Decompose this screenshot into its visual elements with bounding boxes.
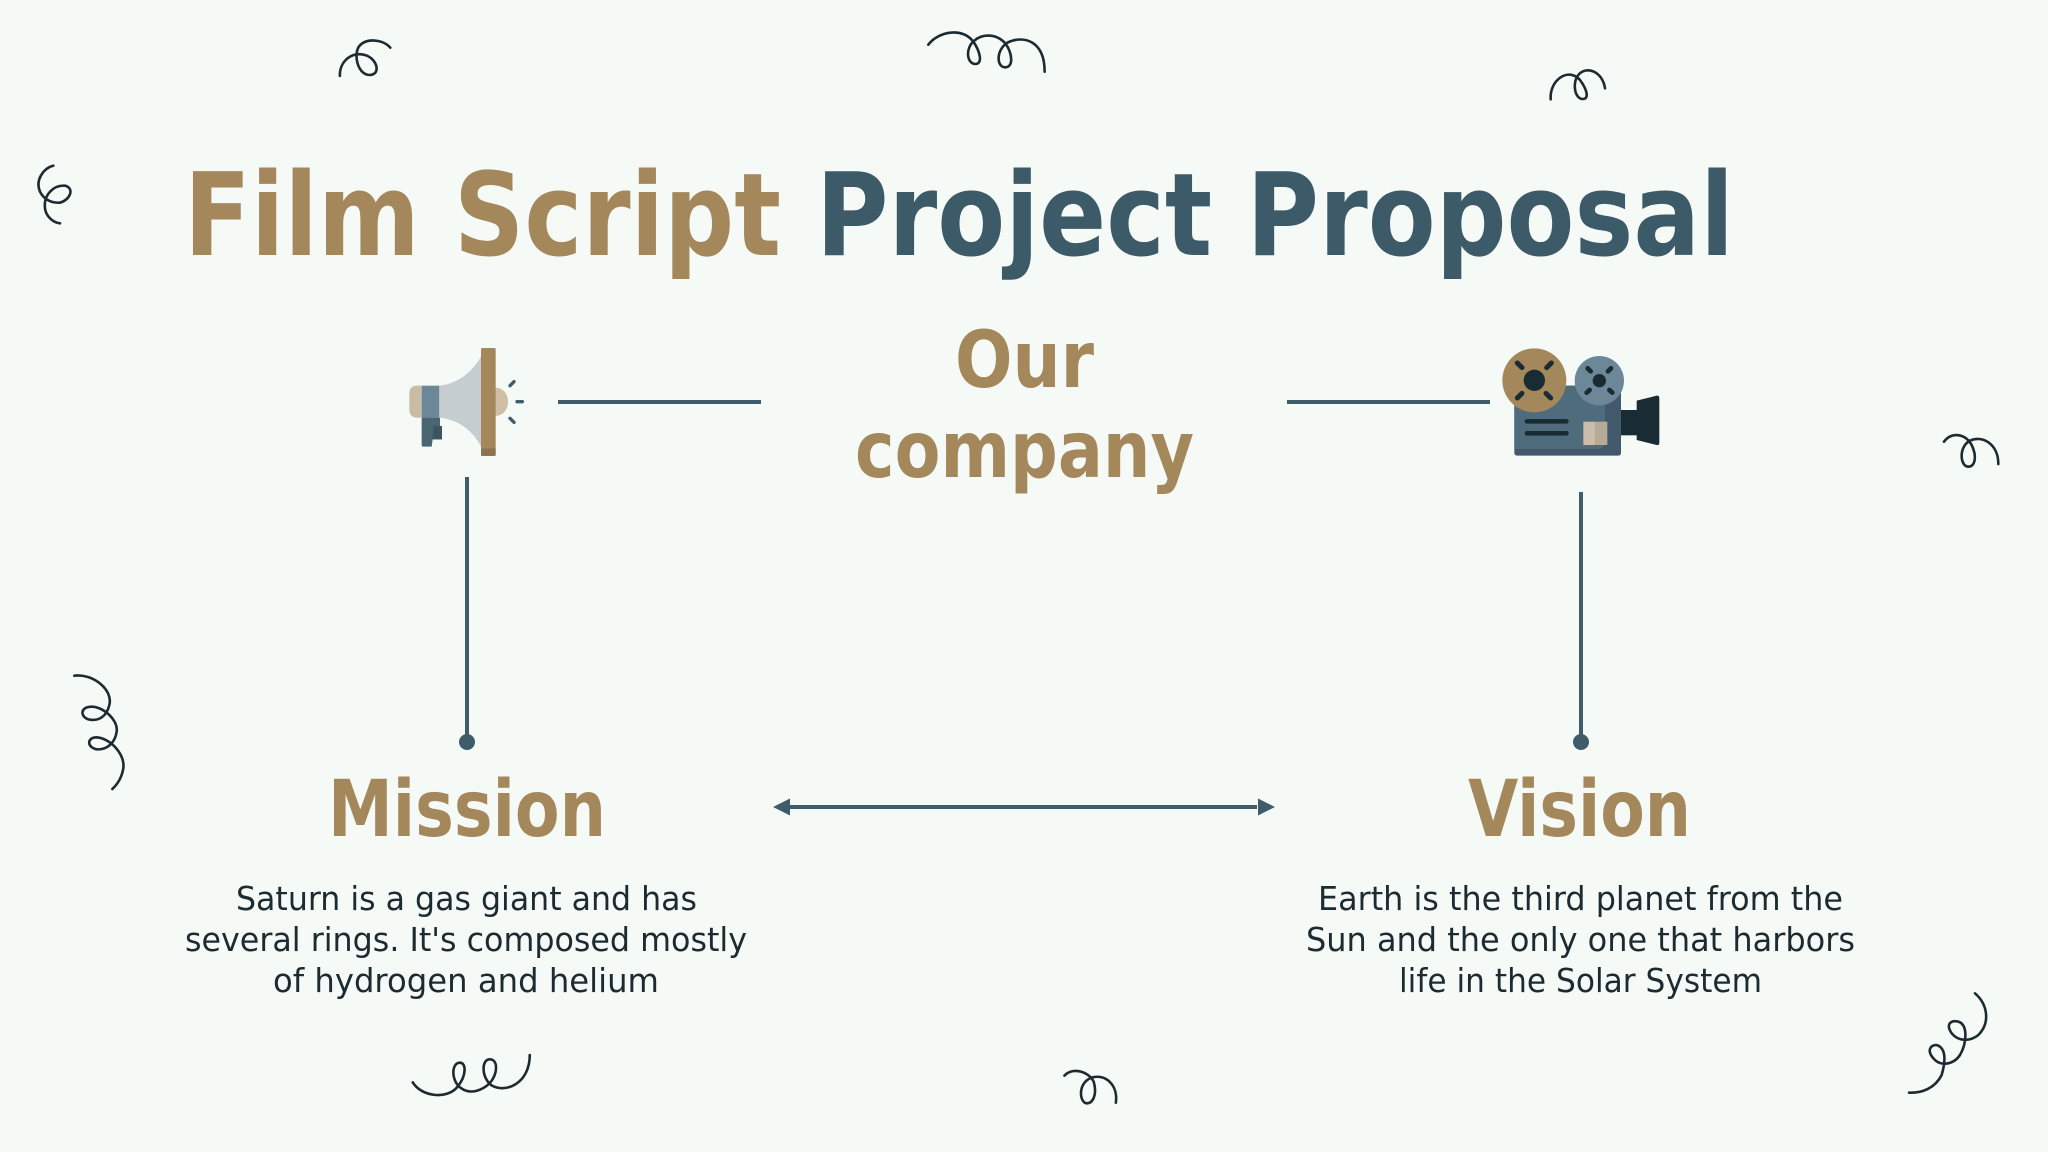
squiggle: right (1944, 435, 1998, 467)
squiggle: bottom left (413, 1055, 530, 1095)
text: vision description: Sun and the only one that harbors (1306, 920, 1855, 959)
text: mission description: Saturn is a gas giant and has (236, 879, 697, 918)
squiggle: top centre (928, 32, 1045, 72)
text: mission description (185, 879, 747, 1000)
icon: megaphone (409, 348, 522, 456)
squiggle: top left (340, 40, 390, 76)
squiggle: upper left (39, 166, 70, 223)
heading: vision: Vision (1468, 765, 1691, 855)
heading: our company (855, 316, 1194, 496)
connector: megaphone to mission (459, 477, 475, 750)
text: vision description: Earth is the third planet from the (1318, 879, 1843, 918)
arrow: mission and vision (773, 798, 1275, 816)
heading: mission: Mission (328, 765, 606, 855)
text: vision description (1306, 879, 1855, 1000)
text: vision description: life in the Solar System (1399, 961, 1762, 1000)
squiggle: top right (1551, 70, 1605, 99)
squiggle: lower left (74, 675, 123, 789)
connector: projector to vision (1573, 492, 1589, 750)
text: mission description: of hydrogen and helium (273, 961, 659, 1000)
connector: company to projector (1287, 400, 1490, 404)
squiggle: bottom centre (1064, 1071, 1116, 1103)
squiggle: bottom right (1909, 993, 1986, 1093)
text: mission description: several rings. It's composed mostly (185, 920, 747, 959)
icon: film projector (1502, 348, 1659, 456)
connector: megaphone to company (558, 400, 761, 404)
title (184, 149, 1734, 283)
heading: our company: Our (955, 316, 1094, 406)
title: Project Proposal (816, 149, 1734, 283)
title: Film Script (184, 149, 781, 283)
heading: our company: company (855, 406, 1194, 496)
